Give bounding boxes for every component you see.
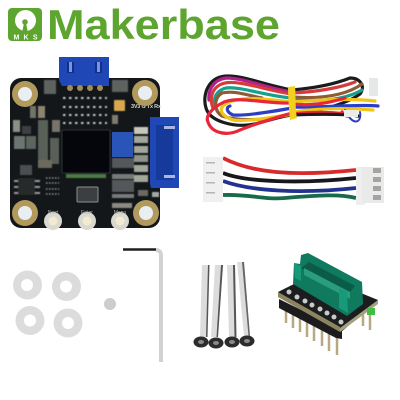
module: green socket bbox=[293, 253, 363, 316]
module: pins bbox=[286, 303, 370, 355]
module: green LED bbox=[367, 308, 375, 315]
logo: MKS badge bbox=[8, 8, 42, 42]
board: PCB body bbox=[10, 78, 160, 228]
cable bundle: multicolor harness bbox=[205, 76, 378, 133]
4-wire cable: right connector bbox=[356, 167, 384, 205]
cable bundle: yellow tie bbox=[288, 86, 297, 120]
cable bundle: white plugs bbox=[344, 78, 378, 117]
logo: MKS badge: MKS bbox=[14, 34, 38, 42]
board: mounting holes bbox=[12, 80, 159, 226]
screw 1 bbox=[194, 265, 210, 348]
screw 3 bbox=[224, 265, 240, 348]
board: button labels bbox=[48, 210, 126, 216]
long screws bbox=[194, 262, 254, 348]
title: Makerbase: Makerbase bbox=[47, 1, 280, 48]
board: component area bbox=[13, 80, 159, 208]
screw 2 bbox=[208, 265, 224, 348]
controller board bbox=[10, 57, 179, 230]
module: black pin header bbox=[279, 299, 342, 339]
washers bbox=[13, 270, 82, 338]
board: MCU chip bbox=[77, 187, 98, 202]
module: solder pads bbox=[286, 290, 344, 324]
board: blue potentiometer bbox=[112, 132, 133, 157]
small spacer disc bbox=[104, 298, 116, 310]
board: pin label: 3V3 G Tx Rx bbox=[131, 104, 162, 110]
4-wire cable: left connector bbox=[203, 157, 223, 202]
module: PCB bbox=[278, 274, 378, 333]
board: buttons bbox=[44, 212, 129, 230]
hex key bbox=[123, 250, 161, 362]
4-wire cable bbox=[203, 157, 384, 205]
driver adapter module bbox=[278, 253, 378, 355]
board: button labels: Enter bbox=[81, 210, 93, 216]
4-wire cable: wires bbox=[223, 158, 356, 198]
screw 4 bbox=[237, 262, 254, 346]
board: OLED screen bbox=[62, 130, 110, 173]
board: top blue connector bbox=[59, 57, 109, 91]
board: button labels: Next bbox=[48, 210, 59, 216]
board: right blue connector bbox=[150, 117, 179, 188]
board: button labels: Menu bbox=[114, 210, 126, 216]
